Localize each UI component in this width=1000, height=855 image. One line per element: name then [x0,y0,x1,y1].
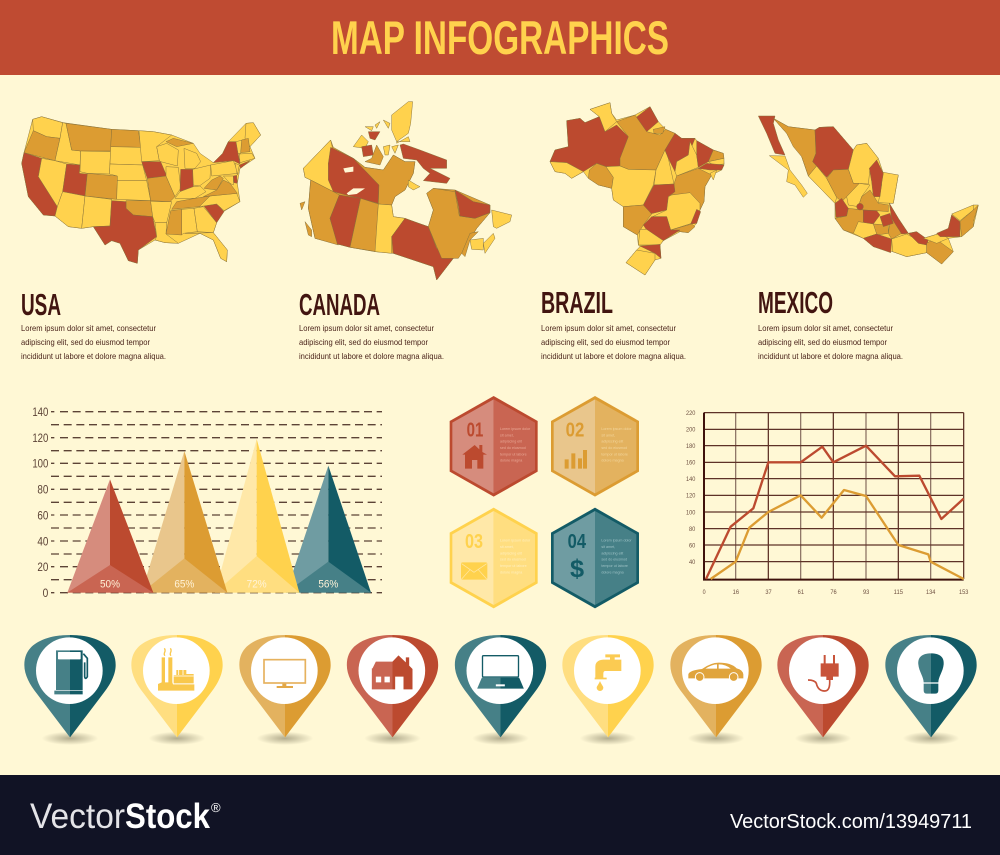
text block: Canada: incididunt ut labore et dolore magna aliqua. [299,351,444,361]
pyramid: 65% [142,451,227,593]
y axis labels: 200 [686,427,696,434]
map: USA [22,117,261,263]
axis labels: 80 [37,483,49,497]
text block: Brazil: BRAZIL [541,285,613,320]
hexagon 01: sit amet, [500,433,514,437]
text block: Mexico [758,285,903,361]
hexagon 01: 01 [467,419,483,441]
pin: electric plug [777,635,869,745]
hexagon 04: adipiscing elit [601,551,623,555]
pyramid: 65%: 65% [174,579,194,591]
footer url: VectorStock.com/13949711 [730,811,972,833]
axis labels: 100 [32,457,49,471]
hexagon 02: sit amet, [601,433,615,437]
hexagon 02: sed do eiusmod [601,446,627,450]
y axis labels: 40 [689,559,696,566]
hexagon 02: adipiscing elit [601,440,623,444]
text block: Mexico: Lorem ipsum dolor sit amet, consectetur [758,323,893,333]
x axis labels: 115 [894,589,903,596]
pin: television [239,635,331,745]
axis labels [32,405,49,600]
line: orange series [711,490,964,579]
hexagon 01: adipiscing elit [500,440,522,444]
map: Mexico [758,116,978,264]
footer logo [30,797,221,836]
hexagon 03 [450,508,538,608]
y axis labels: 100 [686,509,696,516]
text block: Canada: adipiscing elit, sed do eiusmod tempor [299,337,428,347]
pyramid chart [32,405,382,600]
pyramid: 56%: 56% [318,579,338,591]
x axis labels: 153 [959,589,969,596]
pin: fuel pump [24,635,116,745]
hexagon 04: Lorem ipsum dolor [601,539,632,543]
text block: Brazil: adipiscing elit, sed do eiusmod tempor [541,337,670,347]
pin: water tap [562,635,654,745]
footer bar [0,775,1000,855]
x axis labels: 93 [863,589,870,596]
text block: Canada [299,287,444,361]
y axis labels: 220 [686,410,696,417]
text block: Brazil [541,285,686,361]
pin: car [670,635,762,745]
x axis labels: 16 [733,589,739,596]
y axis labels: 120 [686,493,696,500]
text block: Canada: CANADA [299,287,380,322]
hexagon 01: sed do eiusmod [500,446,526,450]
axis labels: 140 [32,405,49,419]
hexagon 02: tempor ut labore [601,452,628,456]
x axis labels: 0 [703,589,706,596]
pin: house [347,635,438,745]
hexagon 04: $ [570,555,584,583]
hexagon 01: Lorem ipsum dolor [500,427,531,431]
axis labels: 20 [37,560,49,574]
text block: USA: USA [21,287,61,322]
text block: USA: incididunt ut labore et dolore magna aliqua. [21,351,166,361]
footer logo: Stock [125,797,210,836]
hexagon 02: dolore magna [601,459,625,463]
x axis labels: 61 [798,589,804,596]
y axis labels: 160 [686,460,696,467]
hexagon cards [450,396,639,608]
pyramid: 56% [286,466,371,593]
axis labels: 60 [37,508,49,522]
title: MAP INFOGRAPHICS [331,11,669,64]
hexagon 03: adipiscing elit [500,551,522,555]
text block: USA: Lorem ipsum dolor sit amet, consectetur [21,323,156,333]
hexagon 02 [551,396,639,497]
line: red series [706,446,964,579]
y axis labels: 180 [686,443,696,450]
map: Brazil [550,103,724,275]
text block: USA: adipiscing elit, sed do eiusmod tempor [21,337,150,347]
x axis labels [703,589,969,596]
text block: Brazil: Lorem ipsum dolor sit amet, consectetur [541,323,676,333]
hexagon 03: sit amet, [500,545,514,549]
axis labels: 40 [37,534,49,548]
footer logo: Vector [30,797,125,836]
text block: Mexico: MEXICO [758,285,833,320]
x axis labels: 37 [765,589,772,596]
text block: USA [21,287,166,361]
y axis labels: 60 [689,542,696,549]
y axis labels: 80 [689,526,696,533]
text block: Brazil: incididunt ut labore et dolore magna aliqua. [541,351,686,361]
axis labels: 0 [43,586,49,600]
hexagon 04: tempor ut labore [601,564,628,568]
hexagon 04 [551,508,639,608]
y axis labels [686,410,696,566]
footer logo: ® [211,800,221,815]
hexagon 02: Lorem ipsum dolor [601,427,632,431]
text block: Mexico: adipiscing elit, sed do eiusmod tempor [758,337,887,347]
y axis labels: 140 [686,476,696,483]
map: Canada [300,102,512,280]
hexagon 04: sed do eiusmod [601,558,627,562]
pyramid: 72%: 72% [247,579,267,591]
x axis labels: 76 [830,589,837,596]
pin: light bulb [885,635,977,745]
pyramid: 72% [215,439,299,593]
pin: laptop [455,635,546,745]
hexagon 04: dolore magna [601,570,625,574]
hexagon 01: tempor ut labore [500,452,527,456]
axis labels: 120 [32,431,49,445]
text block: Canada: Lorem ipsum dolor sit amet, consectetur [299,323,434,333]
header banner [0,0,1000,75]
hexagon 03: 03 [465,531,483,553]
pyramid: 50%: 50% [100,579,120,591]
hexagon 03: dolore magna [500,570,523,574]
hexagon 01: dolore magna [500,459,523,463]
hexagon 04: sit amet, [601,545,615,549]
hexagon 03: tempor ut labore [500,564,527,568]
hexagon 02: 02 [566,419,584,441]
hexagon 03: Lorem ipsum dolor [500,539,531,543]
pyramid: 50% [67,479,153,593]
x axis labels: 134 [926,589,936,596]
hexagon 03: sed do eiusmod [500,558,526,562]
line chart [686,410,969,596]
hexagon 01 [450,396,538,497]
pin: factory [131,635,223,745]
text block: Mexico: incididunt ut labore et dolore magna aliqua. [758,351,903,361]
hexagon 04: 04 [568,531,586,553]
